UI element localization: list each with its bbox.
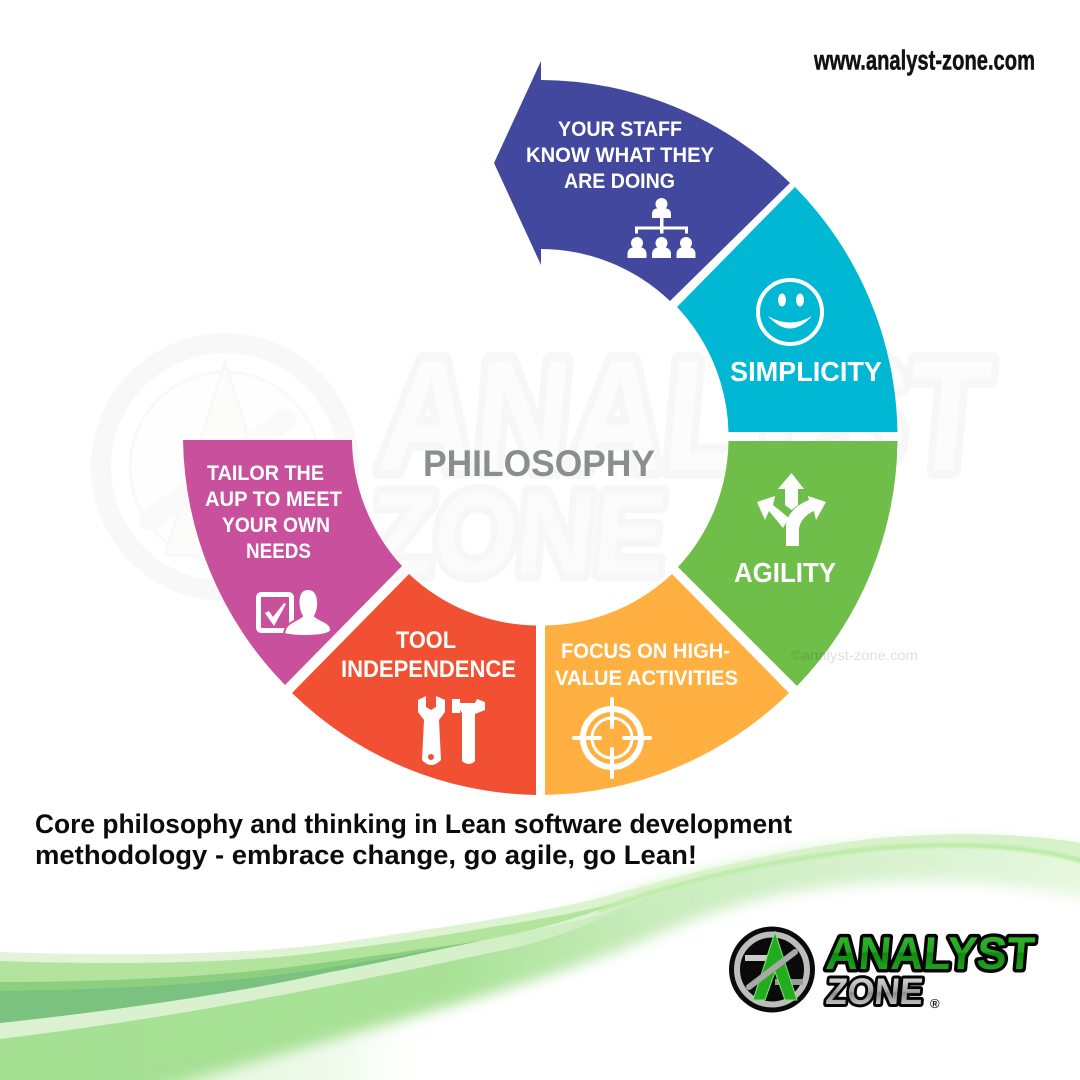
icon: organisation chart	[628, 198, 696, 258]
panel: simplicity: SIMPLICITY	[730, 356, 882, 387]
watermark logo: ZONE	[364, 468, 671, 600]
panel: focus on high-value activities: FOCUS ON HIGH-	[561, 639, 730, 663]
panel: tailor the AUP: AUP TO MEET	[205, 487, 342, 511]
logo emblem	[729, 926, 815, 1012]
caption: Core philosophy and thinking in Lean software development	[35, 809, 792, 839]
icon: smiley	[758, 280, 822, 344]
panel: agility: AGILITY	[734, 557, 836, 588]
panel: focus on high-value activities: VALUE ACTIVITIES	[555, 666, 738, 690]
logo wordmark: ANALYST	[824, 927, 1037, 979]
background swoosh	[0, 834, 1080, 1080]
panel: your staff arrow segment: ARE DOING	[564, 169, 675, 193]
panel: your staff arrow segment: KNOW WHAT THEY	[526, 143, 714, 167]
center heading: PHILOSOPHY	[423, 443, 655, 484]
icon: wrench and hammer	[418, 696, 485, 765]
panel: focus on high-value activities	[545, 574, 789, 795]
caption	[35, 809, 792, 870]
icon: checklist and person	[258, 589, 331, 636]
logo wordmark: ®	[930, 996, 940, 1011]
icon: diverging arrows	[757, 473, 826, 546]
logo wordmark	[824, 927, 1037, 1012]
panel: your staff arrow segment	[494, 61, 790, 301]
caption: methodology - embrace change, go agile, go Lean!	[35, 840, 697, 870]
panel: tailor the AUP: YOUR OWN	[222, 513, 330, 537]
watermark url: ©analyst-zone.com	[791, 647, 918, 663]
panel: tool independence	[292, 574, 536, 795]
panel: simplicity	[677, 187, 898, 432]
panel: tailor the AUP: TAILOR THE	[207, 461, 324, 485]
panel: tool independence: TOOL	[396, 627, 456, 654]
panel: tool independence: INDEPENDENCE	[341, 656, 516, 683]
panel: tailor the AUP	[183, 440, 402, 685]
panel: tailor the AUP: NEEDS	[246, 539, 311, 563]
panel: agility	[678, 441, 898, 686]
watermark logo: ®	[680, 550, 705, 588]
logo	[729, 926, 1037, 1012]
icon: target	[574, 699, 650, 777]
panel: your staff arrow segment: YOUR STAFF	[558, 117, 682, 141]
watermark logo	[101, 327, 996, 600]
logo wordmark: ZONE	[824, 970, 925, 1012]
